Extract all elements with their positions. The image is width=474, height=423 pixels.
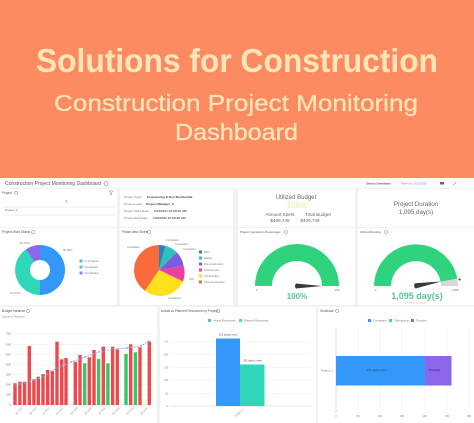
panel: project duration — [358, 189, 474, 227]
bar chart: resources: 131 day(s) used — [243, 358, 262, 362]
panel: project filter: ↖ — [65, 199, 68, 204]
gauge value: 1,095 day(s) — [391, 291, 443, 301]
stacked bar chart: 150 — [400, 415, 405, 418]
dashboard header — [0, 178, 474, 188]
panel: utilized budget: $406,745 — [270, 218, 290, 223]
panel: utilized duration gauge: Behind Schedule — [405, 300, 427, 304]
panel: completion gauge — [238, 228, 355, 305]
donut chart: XX.XX% — [19, 241, 30, 245]
bar chart: actual vs planned: 2000 — [6, 384, 12, 386]
gauge — [255, 244, 339, 286]
panel: workload — [318, 307, 474, 423]
legend: Not Started — [84, 271, 99, 275]
stacked bar chart: Project_1 — [321, 368, 333, 372]
legend — [80, 259, 99, 275]
stacked bar chart: 300 — [467, 415, 472, 418]
pie chart: Completed — [175, 242, 188, 246]
bar chart: resources: Project_1 — [234, 407, 245, 418]
panel: actual vs planned resources: Actual vs Planned Resources by Project — [161, 309, 218, 313]
bar chart: actual vs planned: 5000 — [6, 354, 12, 356]
panel: utilized duration gauge: 0 — [375, 288, 377, 292]
bar chart: actual vs planned: Jul 2017 — [42, 407, 51, 416]
stacked bar chart — [321, 328, 472, 418]
panel: project info: 2/13/2020 12:00:00 AM — [153, 216, 186, 220]
donut chart: XX.XX% — [10, 291, 21, 295]
panel: utilized budget: Utilized Budget — [276, 195, 317, 201]
bar chart: actual vs planned: Apr 2018 — [84, 406, 93, 416]
stacked bar chart: 201 day(s) used — [366, 368, 387, 372]
legend — [208, 318, 269, 322]
bar chart: resources: 175 — [164, 340, 169, 344]
stacked bar chart: 60 day(s) — [429, 368, 440, 372]
dashboard header: ⤢ — [453, 181, 457, 186]
panel: project info: Project Manager_A — [146, 202, 175, 206]
bar chart: resources: 150 — [164, 354, 169, 356]
bar chart: resources: 50 — [165, 392, 169, 396]
panel: utilized duration gauge: 1,095 — [452, 288, 459, 292]
legend: Procurement — [204, 268, 220, 272]
bar chart: resources — [164, 332, 311, 418]
stacked bar chart: 50 — [357, 415, 360, 418]
panel: project status donut: Project Work Status — [2, 230, 31, 234]
panel: project filter — [0, 189, 117, 227]
panel: project info — [120, 189, 233, 227]
subtitle: Construction Project Monitoring — [54, 90, 418, 116]
bar chart: actual vs planned: 1000 — [6, 394, 12, 396]
bar chart: resources: 201 day(s) used — [219, 332, 238, 336]
bar chart: resources: 125 — [164, 366, 169, 370]
bar chart: actual vs planned: 3000 — [6, 374, 12, 376]
legend — [199, 250, 225, 284]
panel: project duration: Project Duration — [394, 201, 439, 208]
bar chart: actual vs planned: Apr 2017 — [29, 406, 38, 416]
title: Solutions for Construction — [36, 42, 438, 79]
gauge value: 100% — [287, 292, 307, 301]
bar chart: actual vs planned — [6, 332, 153, 416]
dashboard header: Others Downtime — [366, 182, 391, 186]
panel: project info: Project Lead: — [124, 202, 142, 206]
bar chart: actual vs planned: 6000 — [6, 344, 12, 346]
panel: utilized budget: $406,745 — [300, 218, 320, 223]
needle — [295, 284, 322, 288]
bar chart: actual vs planned: Apr 2019 — [140, 406, 149, 416]
dashboard header: Construction Project Monitoring Dashboard — [5, 181, 101, 187]
gauge — [374, 244, 457, 286]
bar chart: actual vs planned: Jan 2018 — [70, 406, 79, 416]
panel: completion gauge: 100 — [335, 288, 340, 292]
panel: completion gauge: Project Completion Percentage — [240, 230, 280, 234]
donut chart — [10, 241, 73, 295]
legend: Completed — [373, 318, 387, 322]
panel: project info: Project Type: — [124, 195, 142, 199]
stacked bar chart: 250 — [445, 415, 450, 418]
legend: In Progress — [84, 259, 99, 263]
pie chart — [127, 238, 196, 300]
subtitle — [54, 90, 418, 145]
panel: workload: Workload — [320, 309, 334, 313]
panel: project info: Engineering & Non-Residential — [147, 195, 193, 199]
panel: utilized duration gauge — [358, 228, 474, 305]
needle — [414, 282, 441, 288]
pie chart: XXX — [189, 277, 194, 281]
panel: utilized duration gauge: Utilized Duration — [360, 230, 382, 234]
panel: project filter: Project_1 — [5, 208, 18, 212]
bar chart: actual vs planned: Oct 2018 — [112, 406, 121, 416]
legend: Completed — [84, 265, 98, 269]
bar chart: actual vs planned: 4000 — [6, 364, 12, 366]
panel: budget variance — [0, 307, 157, 423]
panel: utilized budget: Total Budget — [305, 212, 331, 217]
panel: utilized budget: 100% — [287, 201, 307, 210]
panel: project filter: Project — [2, 191, 12, 195]
bar chart: actual vs planned: Oct 2017 — [56, 406, 65, 416]
panel: budget variance: Actual vs Planned — [2, 314, 25, 318]
panel: phase-wise pie — [120, 228, 233, 305]
panel: actual vs planned resources — [160, 307, 316, 423]
panel: phase-wise pie: Phase-wise Share — [122, 230, 148, 234]
legend: Remaining — [395, 318, 409, 322]
panel: utilized budget: Amount Spent — [265, 212, 295, 217]
bar chart: resources: 0 — [167, 405, 169, 408]
legend: Post-construction — [204, 280, 225, 284]
panel: project info: 2/13/2017 12:00:00 AM — [154, 209, 187, 213]
legend: Plan — [204, 250, 210, 254]
stacked bar chart: 200 — [423, 415, 428, 418]
pie chart: Completed — [183, 247, 196, 251]
donut chart: 50.00% — [63, 248, 73, 252]
bar chart: actual vs planned: Jul 2018 — [98, 407, 107, 416]
panel: project duration: 1,095 day(s) — [399, 209, 433, 216]
panel: utilized budget — [238, 189, 355, 227]
legend: Actual Resources — [214, 318, 236, 322]
bar chart: actual vs planned: Jan 2017 — [15, 406, 24, 416]
stacked bar chart: 0 — [335, 415, 337, 418]
bar chart: actual vs planned: 7000 — [6, 332, 12, 336]
bar chart: actual vs planned: 0 — [10, 404, 12, 407]
dashboard header: Filter on: 2/13/2020 — [401, 182, 427, 186]
legend: Planned Resources — [244, 318, 269, 322]
legend: Overdue — [416, 318, 427, 322]
pie chart: Completed — [166, 238, 179, 242]
stacked bar chart: 100 — [378, 415, 383, 418]
panel: project info: Project Start Date: — [124, 209, 149, 213]
panel: project info: Project End Date: — [124, 216, 148, 220]
legend: Construction — [204, 274, 220, 278]
pie chart: Completed — [127, 245, 140, 249]
bar chart: actual vs planned: Jan 2019 — [126, 406, 135, 416]
legend: Design — [204, 256, 213, 260]
legend — [368, 318, 427, 322]
pie chart: Completed — [168, 296, 181, 300]
panel: budget variance: Budget Variance — [2, 309, 26, 313]
panel: completion gauge: 0 — [256, 288, 258, 292]
panel: project status donut — [0, 228, 117, 305]
legend: Pre-construction — [204, 262, 224, 266]
bar chart: resources: 100 — [164, 379, 169, 382]
subtitle: Dashboard — [175, 119, 298, 145]
